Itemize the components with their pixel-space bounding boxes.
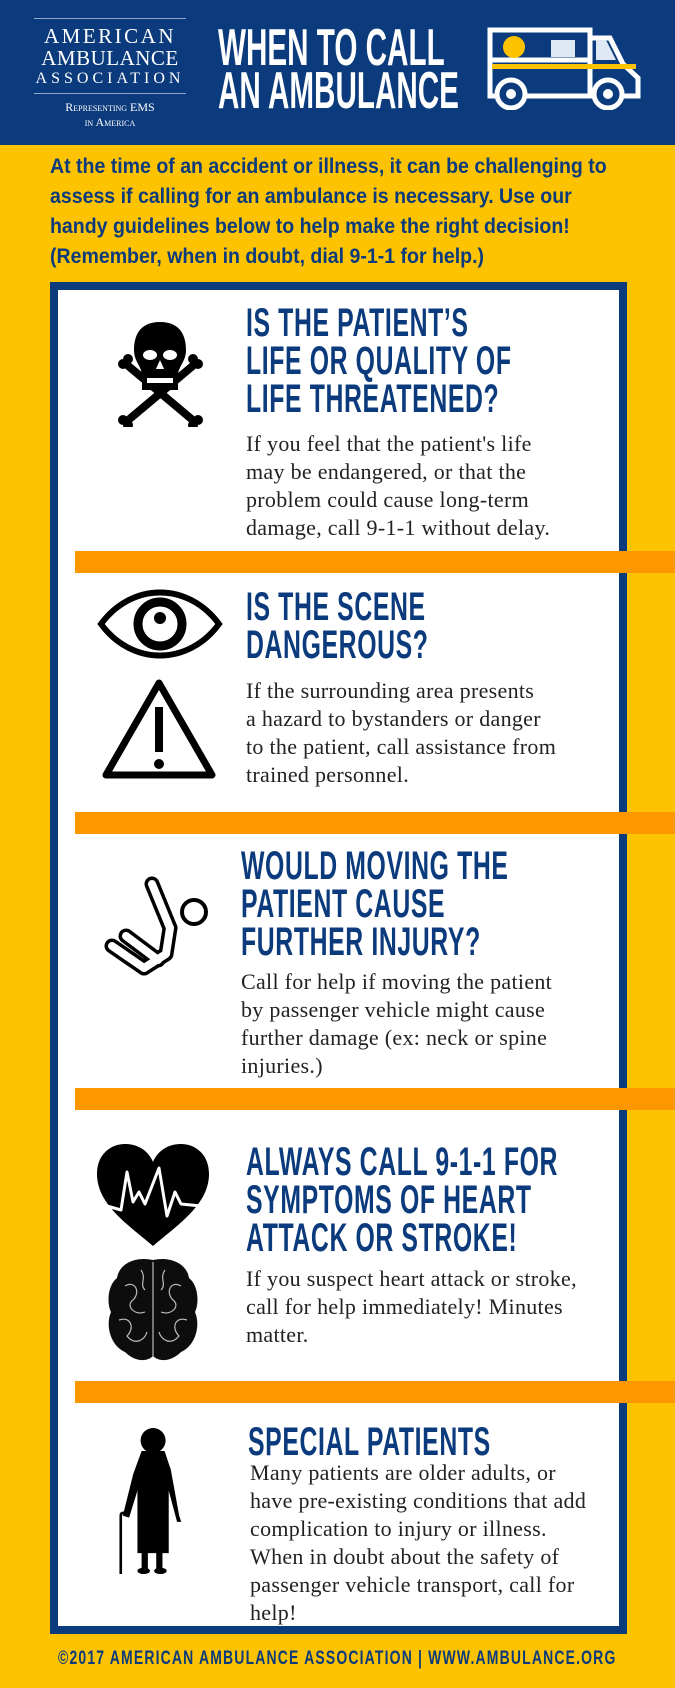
body text: damage, call 9-1-1 without delay.	[246, 515, 550, 540]
body text: passenger vehicle transport, call for	[250, 1572, 574, 1597]
logo: AMERICAN	[44, 24, 176, 48]
logo: Representing EMS	[65, 100, 155, 114]
heading: WOULD MOVING THE	[241, 844, 509, 888]
section 5: special patients	[119, 1420, 586, 1625]
heading: DANGEROUS?	[246, 623, 429, 667]
panel: guidelines	[50, 282, 627, 1634]
body text: trained personnel.	[246, 762, 409, 787]
body text	[246, 431, 550, 540]
icon: elderly person with cane	[119, 1428, 182, 1574]
footer: ©2017 AMERICAN AMBULANCE ASSOCIATION | WWW.AMBULANCE.ORG	[58, 1648, 616, 1669]
heading: FURTHER INJURY?	[241, 920, 481, 964]
body text: If the surrounding area presents	[246, 678, 534, 703]
body text: If you suspect heart attack or stroke,	[246, 1266, 577, 1291]
icon: heart with ECG	[97, 1144, 209, 1246]
logo: AMBULANCE	[41, 46, 179, 70]
heading: IS THE SCENE	[246, 585, 426, 629]
heading: PATIENT CAUSE	[241, 882, 445, 926]
icon: falling person	[104, 876, 208, 976]
divider bars	[75, 551, 675, 573]
body text	[246, 678, 556, 787]
logo: ASSOCIATION	[36, 70, 184, 87]
body text: may be endangered, or that the	[246, 459, 526, 484]
body text: have pre-existing conditions that add	[250, 1488, 586, 1513]
body text	[246, 1266, 577, 1347]
heading	[246, 1140, 558, 1260]
heading: SYMPTOMS OF HEART	[246, 1178, 532, 1222]
section 3: moving patient	[104, 844, 552, 1078]
body text: If you feel that the patient's life	[246, 431, 532, 456]
intro text: handy guidelines below to help make the right decision!	[50, 215, 570, 238]
heading: LIFE THREATENED?	[246, 377, 499, 421]
icon: ambulance	[488, 28, 640, 110]
intro text	[50, 155, 607, 268]
heading	[241, 844, 509, 964]
body text	[241, 969, 552, 1078]
body text: Call for help if moving the patient	[241, 969, 552, 994]
heading	[246, 301, 512, 421]
icon: warning triangle	[102, 680, 216, 778]
logo: in America	[85, 115, 135, 129]
icon: eye	[97, 590, 223, 658]
title: WHEN TO CALL	[218, 19, 445, 77]
body text: complication to injury or illness.	[250, 1516, 547, 1541]
intro text: (Remember, when in doubt, dial 9-1-1 for help.)	[50, 245, 484, 268]
body text: Many patients are older adults, or	[250, 1460, 556, 1485]
heading: ALWAYS CALL 9-1-1 FOR	[246, 1140, 558, 1184]
body text: injuries.)	[241, 1053, 323, 1078]
body text: further damage (ex: neck or spine	[241, 1025, 547, 1050]
body text: help!	[250, 1600, 297, 1625]
heading	[246, 585, 429, 667]
logo	[34, 18, 186, 129]
body text: When in doubt about the safety of	[250, 1544, 559, 1569]
header band	[0, 0, 675, 145]
heading: IS THE PATIENT’S	[246, 301, 469, 345]
section 4: heart attack or stroke	[97, 1140, 577, 1360]
body text: by passenger vehicle might cause	[241, 997, 545, 1022]
intro text: At the time of an accident or illness, it can be challenging to	[50, 155, 607, 178]
icon: skull and crossbones	[118, 322, 203, 427]
heading: LIFE OR QUALITY OF	[246, 339, 512, 383]
body text: call for help immediately! Minutes	[246, 1294, 563, 1319]
section 1: life threatened	[118, 301, 550, 540]
body text: a hazard to bystanders or danger	[246, 706, 541, 731]
heading: SPECIAL PATIENTS	[248, 1420, 491, 1464]
icon: brain	[108, 1259, 198, 1360]
title: AN AMBULANCE	[218, 62, 459, 120]
heading: ATTACK OR STROKE!	[246, 1216, 517, 1260]
body text: to the patient, call assistance from	[246, 734, 556, 759]
body text: matter.	[246, 1322, 309, 1347]
section 2: scene dangerous	[97, 585, 556, 787]
title	[218, 19, 459, 120]
intro text: assess if calling for an ambulance is necessary. Use our	[50, 185, 572, 208]
body text: problem could cause long-term	[246, 487, 529, 512]
body text	[250, 1460, 586, 1625]
